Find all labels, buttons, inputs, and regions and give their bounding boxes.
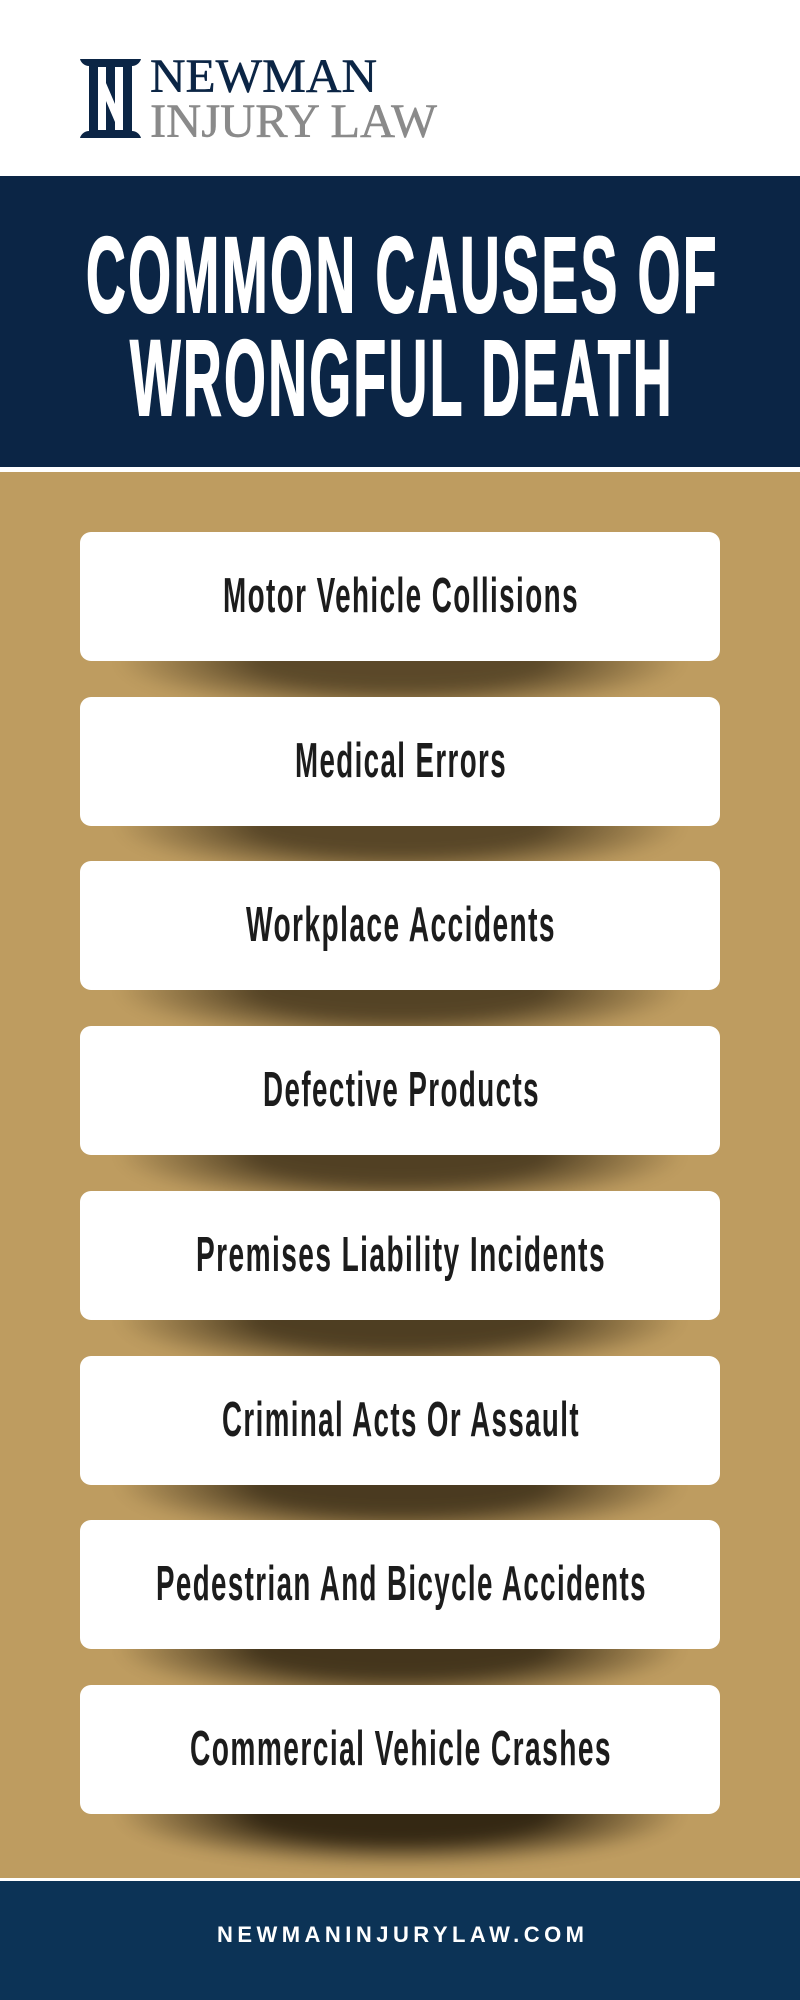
card: Medical Errors: [80, 697, 720, 861]
card: Medical Errors: Medical Errors: [295, 734, 507, 788]
logo text: Injury Law: INJURY LAW: [150, 95, 438, 148]
logo text: Newman: NEWMAN: [150, 50, 377, 103]
card: Commercial Vehicle Crashes: [80, 1685, 720, 1870]
icon: column with N: [80, 59, 141, 138]
gold panel: causes list: [0, 472, 800, 1878]
card: Motor Vehicle Collisions: [80, 532, 720, 697]
card: Defective Products: [80, 1026, 720, 1191]
card: Workplace Accidents: [80, 861, 720, 1026]
footer bar: [0, 1881, 800, 2000]
logo: [0, 0, 800, 176]
card: Pedestrian And Bicycle Accidents: [80, 1520, 720, 1685]
card: Criminal Acts Or Assault: [80, 1356, 720, 1520]
footer website: NEWMANINJURYLAW.COM: [217, 1922, 584, 1947]
title banner: [0, 176, 800, 467]
card: Premises Liability Incidents: [80, 1191, 720, 1356]
